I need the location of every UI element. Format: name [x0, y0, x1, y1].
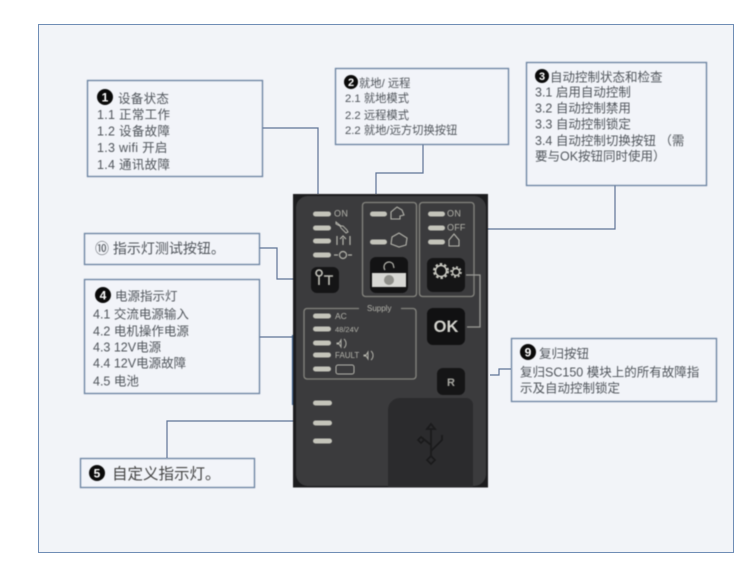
icon: USB symbol [418, 424, 442, 464]
box 4 text: 4.5 电池 [93, 374, 139, 388]
box 1: device status [88, 80, 262, 176]
number badge 3: 3 [539, 71, 545, 83]
connector: box 5 to custom indicators [167, 421, 294, 458]
box 1 text: 设备状态 [118, 91, 169, 106]
box 3 text: 要与OK按钮同时使用） [535, 148, 666, 164]
box 2 text: 2.2 远程模式 [345, 109, 409, 122]
number badge 2 [344, 75, 358, 89]
box 9 text: 复归SC150 模块上的所有故障指 [520, 364, 699, 380]
group: auto control [420, 202, 474, 296]
box 5: custom indicators [80, 458, 254, 488]
group: auto control: OFF [447, 222, 466, 232]
connector: box 2 to panel [376, 144, 423, 194]
number badge 5: 5 [94, 466, 101, 480]
box 2: local / remote [336, 68, 508, 144]
USB cover [388, 398, 473, 487]
OK button: OK [434, 318, 458, 336]
connector: box 10 to test button [259, 248, 296, 290]
box 10 text: ⑩ 指示灯测试按钮。 [95, 240, 225, 256]
box 2 text: 2.2 就地/远方切换按钮 [345, 123, 457, 137]
box 3: auto control status [526, 62, 706, 186]
connector: box 3 to panel [475, 185, 615, 229]
box 1 text: 1.2 设备故障 [97, 124, 170, 138]
box 4 text: 电源指示灯 [115, 288, 178, 304]
number badge 4 [95, 287, 111, 303]
box 1 text: 1.1 正常工作 [97, 108, 170, 122]
box 1 text: 1.4 通讯故障 [97, 157, 170, 172]
blue edge line [292, 335, 294, 405]
box 4 text: 4.4 12V电源故障 [93, 356, 186, 370]
box 3 text: 3.4 自动控制切换按钮 （需 [535, 133, 684, 148]
reset button [437, 368, 465, 395]
group: supply indicators: FAULT [335, 351, 359, 360]
auto control button [427, 258, 465, 292]
box 9 text: 复归按钮 [539, 346, 589, 361]
box 3 text: 自动控制状态和检查 [550, 70, 663, 84]
number badge 9 [520, 344, 536, 360]
connector: box 4 to panel [259, 336, 293, 338]
connector: box 9 to reset button [490, 369, 511, 375]
box 9: reset button [512, 338, 716, 402]
box 5 text: 自定义指示灯。 [112, 465, 221, 483]
box 3 text: 3.3 自动控制锁定 [535, 116, 631, 132]
group: supply indicators: 48/24V [335, 325, 359, 334]
box 3 text: 3.1 启用自动控制 [535, 86, 631, 100]
test button [311, 267, 339, 293]
box 4: power indicators [84, 280, 260, 394]
number badge 9: 9 [525, 346, 532, 360]
reset button: R [447, 377, 455, 389]
group: supply indicators: AC [335, 311, 347, 321]
number badge 4: 4 [100, 288, 107, 302]
box 3 text: 3.2 自动控制禁用 [535, 102, 631, 116]
box 2 text: 2.1 就地模式 [345, 91, 409, 105]
box 4 text: 4.3 12V电源 [93, 340, 162, 354]
box 1 text: 1.3 wifi 开启 [97, 141, 168, 155]
number badge 5 [89, 465, 105, 481]
box 9 text: 示及自动控制锁定 [520, 380, 620, 396]
device panel [292, 194, 488, 488]
custom indicators [313, 400, 332, 444]
group: auto control: ON [447, 208, 461, 218]
box 10: indicator test button [84, 234, 260, 264]
box 4 text: 4.1 交流电源输入 [93, 306, 189, 322]
group: supply indicators [304, 304, 416, 379]
OK button [427, 308, 465, 345]
local remote switch button [370, 257, 408, 293]
box 4 text: 4.2 电机操作电源 [93, 324, 189, 338]
group: local remote [362, 202, 416, 296]
number badge 2: 2 [348, 77, 354, 89]
number badge 1: 1 [102, 90, 109, 104]
box 2 text: 就地/ 远程 [359, 76, 410, 90]
group: supply indicators: Supply [367, 304, 391, 313]
group: device status indicators: ON [334, 208, 348, 218]
number badge 1 [97, 89, 113, 105]
group: device status indicators [313, 208, 352, 258]
connector: box 1 to panel [262, 128, 318, 194]
number badge 3 [535, 69, 549, 83]
OK link line [466, 275, 480, 327]
